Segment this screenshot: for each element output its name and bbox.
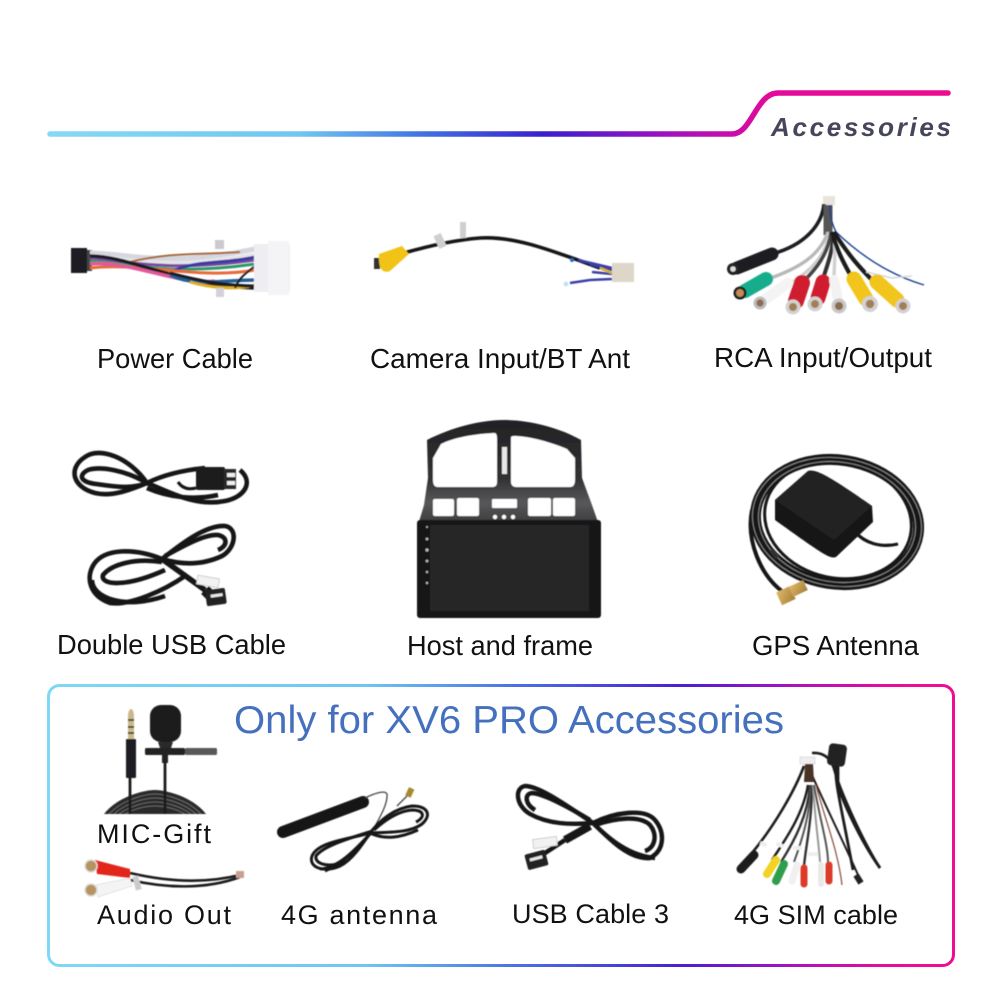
label: Audio Out: Audio Out xyxy=(97,900,231,930)
icon: GPS antenna xyxy=(743,445,931,605)
label: MIC-Gift: MIC-Gift xyxy=(97,819,211,849)
icon: power cable xyxy=(71,240,290,297)
icon: double USB cable xyxy=(75,453,247,606)
panel heading: Only for XV6 PRO Accessories xyxy=(234,699,784,742)
dash frame body xyxy=(417,420,600,617)
frame window: left xyxy=(433,433,497,487)
cable coil xyxy=(104,790,206,814)
panel: XV6 PRO accessories xyxy=(48,686,954,966)
upper USB cable xyxy=(75,453,247,502)
label: Host and frame: Host and frame xyxy=(407,630,593,661)
frame window: right xyxy=(511,436,575,487)
label: Power Cable: Power Cable xyxy=(97,343,253,374)
icon: USB cable 3 xyxy=(518,786,662,870)
icon: camera input and BT antenna cable xyxy=(374,222,634,286)
frame buttons xyxy=(433,498,575,519)
label: RCA Input/Output: RCA Input/Output xyxy=(714,342,932,373)
heading: Accessories: Accessories xyxy=(770,112,951,142)
black 3.5mm socket xyxy=(727,254,772,275)
label: USB Cable 3: USB Cable 3 xyxy=(512,899,669,929)
label: Double USB Cable: Double USB Cable xyxy=(57,629,286,660)
head unit screen xyxy=(417,520,601,618)
icon: audio out cable xyxy=(85,860,244,897)
header rule line xyxy=(50,93,948,134)
icon: 4G SIM cable xyxy=(741,743,880,885)
RCA plugs xyxy=(734,279,910,314)
label: GPS Antenna: GPS Antenna xyxy=(752,630,920,661)
icon: host and frame xyxy=(417,420,601,618)
lower USB cable xyxy=(90,526,234,606)
label: 4G SIM cable: 4G SIM cable xyxy=(734,900,898,930)
icon: lavalier microphone xyxy=(104,705,217,814)
icon: 4G antenna xyxy=(283,787,427,871)
label: 4G antenna: 4G antenna xyxy=(281,900,438,930)
label: Camera Input/BT Ant: Camera Input/BT Ant xyxy=(370,343,630,374)
icon: RCA input and output cable xyxy=(727,196,924,314)
